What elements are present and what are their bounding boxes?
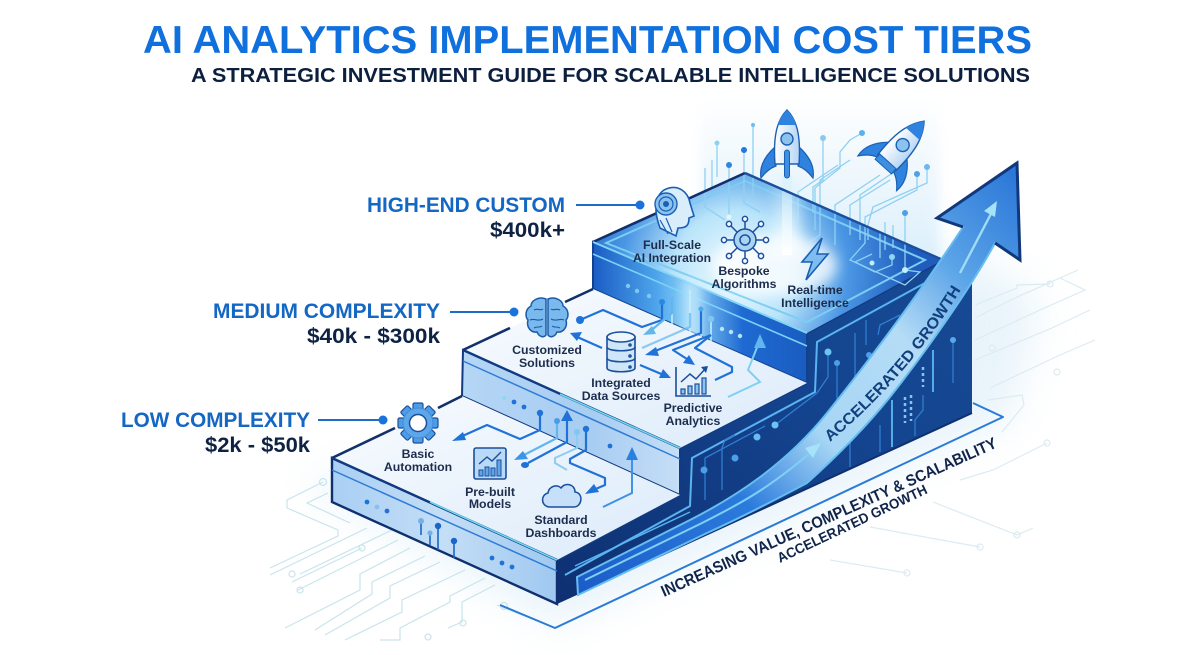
panel: low complexity tier bbox=[332, 396, 680, 604]
icon: pre-built models chart bbox=[474, 448, 506, 479]
tier 1 front face bbox=[332, 458, 557, 604]
text: pre-built models: Models bbox=[469, 497, 511, 511]
icon: tilted rocket bbox=[858, 104, 944, 191]
growth arrow bbox=[576, 160, 1022, 596]
text: basic automation: Automation bbox=[384, 460, 452, 474]
label: high-end custom: HIGH-END CUSTOM bbox=[367, 194, 565, 217]
riser dots bbox=[502, 396, 612, 448]
icon: gear bbox=[398, 403, 438, 443]
tier 2 riser bbox=[462, 350, 680, 495]
icon: brain bbox=[526, 298, 568, 337]
text: standard dashboards: Dashboards bbox=[525, 526, 597, 540]
text: real-time intelligence bbox=[781, 283, 849, 310]
label: medium complexity: MEDIUM COMPLEXITY bbox=[213, 300, 440, 323]
base caption: accelerated growth: ACCELERATED GROWTH bbox=[774, 481, 930, 566]
text: bespoke algorithms bbox=[712, 264, 777, 291]
text: bespoke algorithms: Bespoke bbox=[718, 264, 770, 278]
base caption: increasing value: INCREASING VALUE, COMPLEXITY & SCALABILITY bbox=[659, 435, 1000, 601]
front face pins bbox=[365, 500, 514, 569]
text: real-time intelligence: Real-time bbox=[787, 283, 843, 297]
text: pre-built models: Pre-built bbox=[465, 485, 515, 499]
text: standard dashboards: Standard bbox=[534, 513, 588, 527]
icon: lightning bolt bbox=[802, 238, 828, 280]
icon: predictive chart bbox=[676, 366, 711, 396]
text: predictive analytics: Predictive bbox=[664, 401, 723, 415]
text: real-time intelligence: Intelligence bbox=[781, 296, 849, 310]
text: bespoke algorithms: Algorithms bbox=[712, 277, 777, 291]
text: basic automation: Basic bbox=[402, 447, 435, 461]
text: predictive analytics bbox=[664, 401, 723, 428]
tier 3 riser bbox=[593, 242, 807, 383]
circuit arrows bbox=[570, 297, 766, 397]
panel: side wall bbox=[557, 245, 972, 603]
icon: bespoke network bbox=[721, 216, 769, 264]
label: low complexity: LOW COMPLEXITY bbox=[121, 409, 310, 432]
text: full-scale AI integration: Full-Scale bbox=[643, 238, 701, 252]
circuit arrows bbox=[452, 410, 638, 507]
text: integrated data sources bbox=[582, 376, 660, 403]
icon: database bbox=[607, 332, 635, 372]
panel: base platform line bbox=[500, 403, 1003, 628]
text: customized solutions bbox=[512, 343, 582, 370]
text: full-scale AI integration bbox=[633, 238, 711, 265]
icon: cloud bbox=[543, 485, 581, 507]
label: high-end custom bbox=[367, 194, 644, 242]
text: predictive analytics: Analytics bbox=[666, 414, 720, 428]
title: AI ANALYTICS IMPLEMENTATION COST TIERS bbox=[143, 19, 1032, 62]
text: customized solutions: Customized bbox=[512, 343, 582, 357]
text: full-scale AI integration: AI Integration bbox=[633, 251, 711, 265]
tier 2 top face bbox=[463, 289, 807, 448]
text: customized solutions: Solutions bbox=[519, 356, 575, 370]
text: standard dashboards bbox=[525, 513, 597, 540]
label: medium complexity bbox=[213, 300, 518, 348]
label: low complexity bbox=[121, 409, 388, 457]
label: high-end custom: $400k+ bbox=[490, 219, 565, 242]
tier 3 top face bbox=[593, 173, 943, 333]
text: integrated data sources: Integrated bbox=[591, 376, 651, 390]
text: basic automation bbox=[384, 447, 452, 474]
arrow label: ACCELERATED GROWTH bbox=[826, 285, 960, 442]
panel: medium complexity tier bbox=[462, 289, 807, 495]
panel: high-end custom tier bbox=[593, 123, 943, 383]
tier 1 top face bbox=[332, 396, 680, 560]
subtitle: A STRATEGIC INVESTMENT GUIDE FOR SCALABLE INTELLIGENCE SOLUTIONS bbox=[191, 64, 1030, 87]
label: medium complexity: $40k - $300k bbox=[307, 325, 440, 348]
riser dots bbox=[626, 280, 742, 345]
text: integrated data sources: Data Sources bbox=[582, 389, 660, 403]
label: low complexity: $2k - $50k bbox=[205, 434, 310, 457]
text: pre-built models bbox=[465, 485, 515, 511]
icon: upright rocket bbox=[761, 110, 813, 178]
icon: AI head bbox=[655, 188, 694, 236]
